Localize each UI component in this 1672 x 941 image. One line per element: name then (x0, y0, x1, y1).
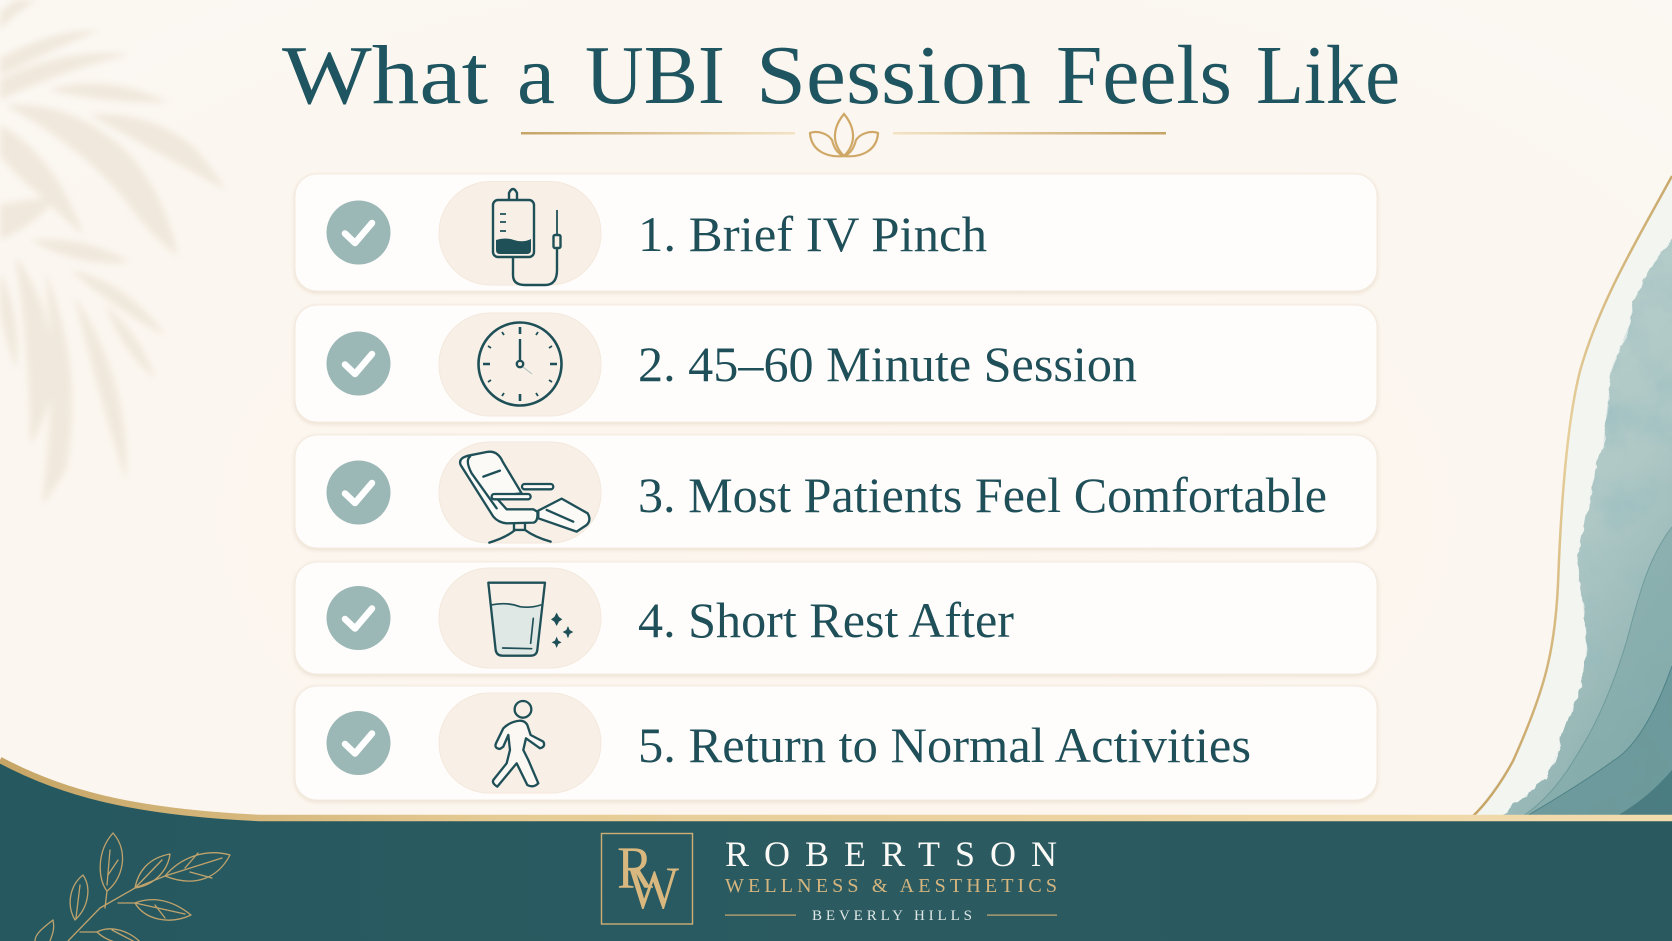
title (282, 29, 1400, 122)
watercolor corner (1472, 176, 1672, 817)
icon: lotus (810, 114, 878, 156)
label 3: 3. Most Patients Feel Comfortable (638, 467, 1327, 523)
check badge 1 (326, 200, 390, 264)
divider with lotus (521, 114, 1166, 156)
label 2: 2. 45–60 Minute Session (638, 336, 1137, 392)
title: Like (1256, 29, 1400, 122)
title: UBI (585, 29, 725, 122)
panel: step 3 (295, 435, 1377, 548)
check badge 3 (326, 460, 390, 524)
brand name: ROBERTSON (725, 834, 1057, 874)
location: BEVERLY HILLS (812, 908, 972, 924)
check badge 2 (326, 332, 390, 396)
icon pill: walking person (439, 693, 601, 793)
panel: step 2 (295, 305, 1377, 422)
logo (602, 834, 1057, 924)
logo monogram (602, 834, 692, 924)
title: Feels (1056, 29, 1232, 122)
leaf sprig (35, 833, 230, 941)
logo monogram: R (617, 835, 653, 901)
check badge 4 (326, 586, 390, 650)
title: Session (756, 29, 1031, 122)
palm leaf shadow (0, 0, 226, 505)
panel: step 5 (295, 686, 1377, 800)
panel: step 4 (295, 562, 1377, 674)
icon pill: clock (439, 313, 601, 416)
brand subtitle: WELLNESS & AESTHETICS (725, 875, 1057, 897)
check badge 5 (326, 711, 390, 775)
label 1: 1. Brief IV Pinch (638, 206, 987, 262)
panel: step 1 (295, 174, 1377, 291)
label 5: 5. Return to Normal Activities (638, 717, 1251, 773)
logo monogram: W (627, 855, 679, 921)
icon pill: recliner chair (439, 442, 601, 543)
title: What (282, 29, 488, 122)
label 4: 4. Short Rest After (638, 592, 1014, 648)
gold curve (1472, 176, 1672, 817)
footer band (0, 760, 1672, 941)
title: a (517, 29, 555, 122)
icon pill: water glass (439, 568, 601, 668)
icon pill: IV bag (439, 182, 601, 285)
